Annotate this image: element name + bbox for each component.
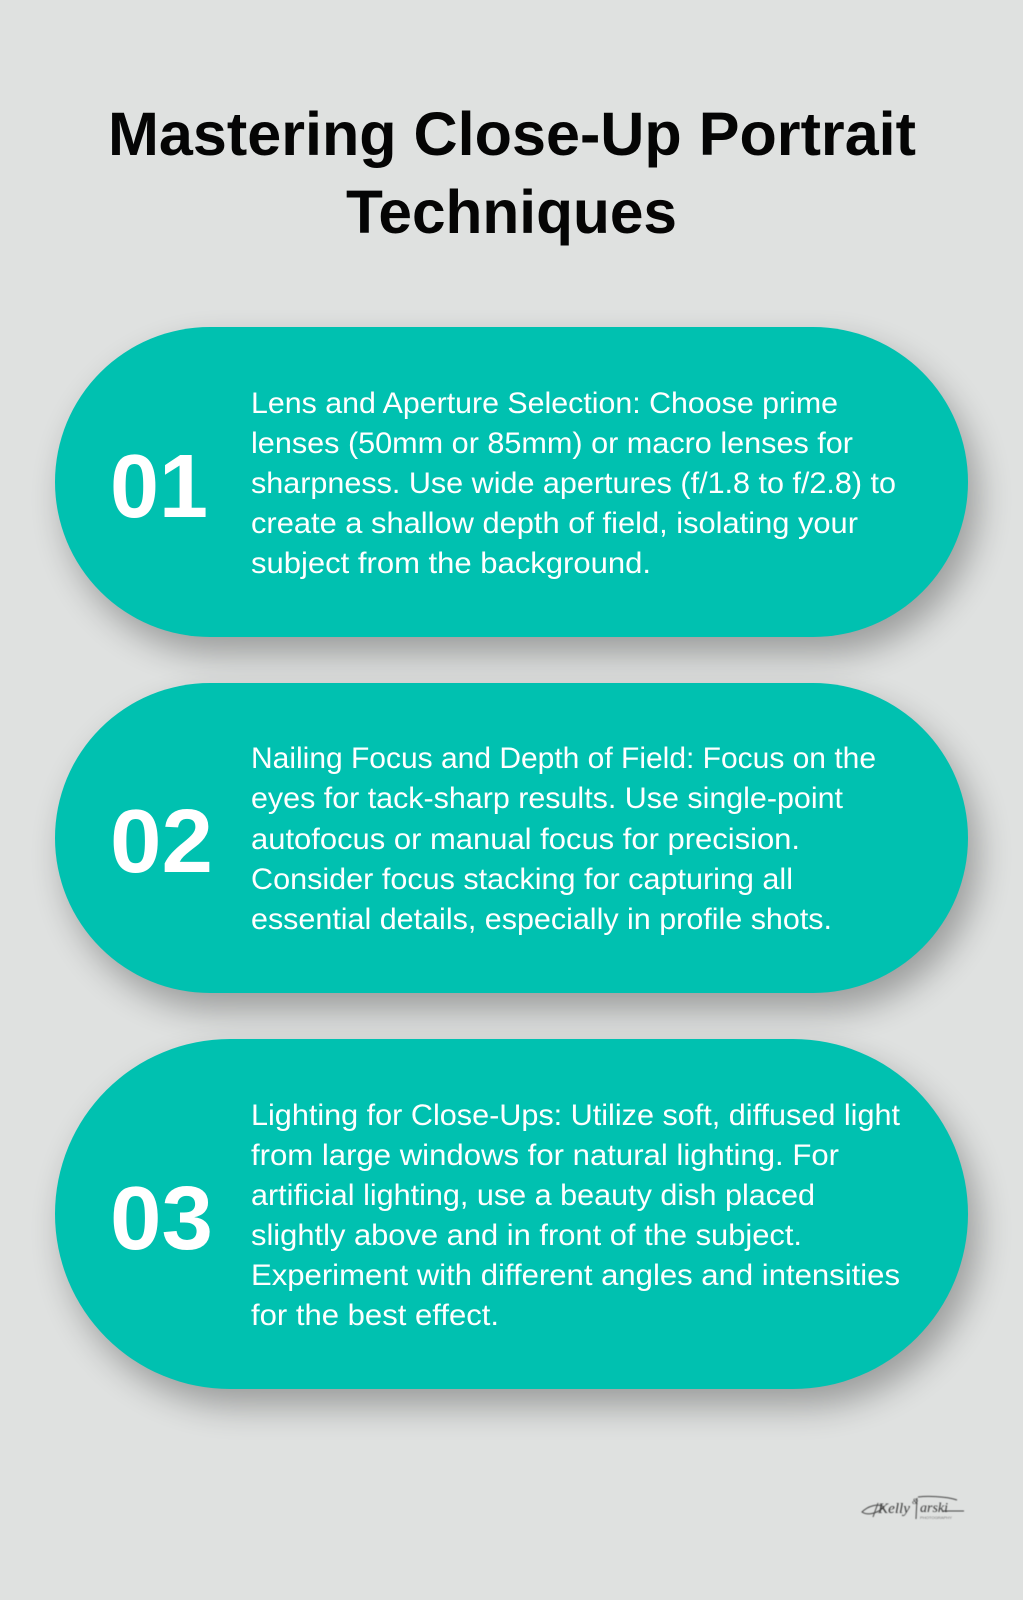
text: lighting for close-ups: artificial lighting, use a beauty dish placed — [251, 1179, 815, 1212]
text: lighting for close-ups: for the best effect. — [251, 1299, 499, 1332]
panel: step 03 lighting — [55, 1039, 978, 1406]
text: lens and aperture selection — [251, 387, 896, 580]
text: lighting for close-ups: Experiment with different angles and intensities — [251, 1259, 900, 1292]
logo: signature: & — [912, 1497, 919, 1506]
title: Mastering Close-Up Portrait — [108, 100, 916, 168]
text: lens and aperture selection: Lens and Aperture Selection: Choose prime — [251, 387, 838, 420]
logo: signature — [862, 1496, 964, 1520]
text: nailing focus and depth of field: autofocus or manual focus for precision. — [251, 823, 800, 856]
text: nailing focus and depth of field: eyes for tack-sharp results. Use single-point — [251, 782, 844, 815]
text: lens and aperture selection: create a shallow depth of field, isolating your — [251, 507, 858, 540]
text: nailing focus and depth of field: essential details, especially in profile shots. — [251, 903, 832, 936]
logo: signature: Kelly — [877, 1501, 910, 1517]
title — [108, 100, 916, 246]
panel: step 02 focus and depth of field — [55, 683, 978, 1010]
text: lighting for close-ups: slightly above and in front of the subject. — [251, 1219, 802, 1252]
text: lens and aperture selection: subject from the background. — [251, 547, 651, 580]
text: nailing focus and depth of field — [251, 742, 876, 936]
text: lighting for close-ups: Lighting for Close-Ups: Utilize soft, diffused light — [251, 1099, 901, 1132]
number 02: 02 — [110, 792, 213, 892]
text: lighting for close-ups — [251, 1099, 901, 1332]
number 01: 01 — [110, 437, 208, 537]
text: lighting for close-ups: from large windows for natural lighting. For — [251, 1139, 839, 1172]
panel: step 01 lens and aperture — [55, 327, 978, 654]
title: Techniques — [346, 178, 677, 246]
text: lens and aperture selection: lenses (50mm or 85mm) or macro lenses for — [251, 427, 853, 460]
text: nailing focus and depth of field: Nailing Focus and Depth of Field: Focus on the — [251, 742, 876, 775]
logo: signature: PHOTOGRAPHY — [920, 1515, 952, 1520]
logo: signature: arski — [920, 1501, 948, 1516]
number 03: 03 — [110, 1169, 213, 1269]
text: nailing focus and depth of field: Consider focus stacking for capturing all — [251, 863, 793, 896]
text: lens and aperture selection: sharpness. Use wide apertures (f/1.8 to f/2.8) to — [251, 467, 896, 500]
